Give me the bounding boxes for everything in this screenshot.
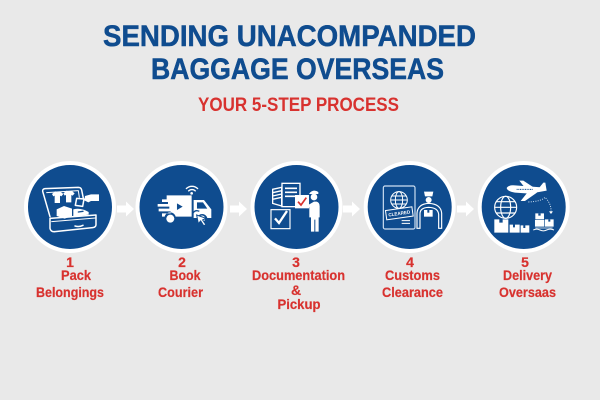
arrow: step 4 to 5: [457, 202, 474, 216]
step 3 label: &: [291, 282, 301, 298]
title: SENDING UNACOMPANDED: [103, 20, 476, 53]
step 5: delivery overseas: [480, 163, 568, 300]
step 1 label: 1: [66, 254, 74, 270]
step 4 label: 4: [406, 254, 414, 270]
step 4 label: [382, 254, 443, 300]
arrow: step 3 to 4: [343, 202, 360, 216]
step 1 label: Belongings: [36, 284, 104, 300]
step 1: pack belongings: [26, 163, 114, 300]
step 3 label: [252, 254, 345, 312]
step 2 label: [158, 254, 203, 300]
icon: plane, globe and cargo: [494, 181, 554, 233]
step 3 label: 3: [292, 254, 300, 270]
step 3: documentation and pickup: [252, 163, 345, 312]
step 1 label: [36, 254, 104, 300]
step 5 label: [499, 254, 556, 300]
step 3 label: Pickup: [278, 296, 320, 312]
step 2 label: 2: [178, 254, 186, 270]
badge circle 1: [26, 163, 114, 251]
step 5 label: Delivery: [503, 267, 552, 283]
badge circle 4: [366, 163, 454, 251]
subtitle: YOUR 5-STEP PROCESS: [198, 94, 399, 116]
step 2 label: Book: [170, 267, 201, 283]
step 4 label: Customs: [385, 267, 440, 283]
step 5 label: 5: [521, 254, 529, 270]
icon: passport and customs officer: CLEARED: [388, 209, 411, 217]
icon: open suitcase: [43, 187, 99, 232]
step 3 label: Documentation: [252, 267, 345, 283]
step 4: customs clearance: [366, 163, 454, 300]
step 2: book courier: [138, 163, 226, 300]
badge circle 5: [480, 163, 568, 251]
icon: delivery truck: [158, 186, 211, 226]
step 2 label: Courier: [158, 284, 203, 300]
arrow: step 2 to 3: [230, 202, 247, 216]
badge circle 2: [138, 163, 226, 251]
icon: documents and courier: [271, 183, 320, 232]
title: [103, 20, 476, 86]
step 5 label: Oversaas: [499, 284, 556, 300]
title: BAGGAGE OVERSEAS: [151, 53, 444, 86]
step 1 label: Pack: [61, 267, 91, 283]
step 4 label: Clearance: [382, 284, 443, 300]
arrow: step 1 to 2: [117, 202, 134, 216]
badge circle 3: [252, 163, 340, 251]
